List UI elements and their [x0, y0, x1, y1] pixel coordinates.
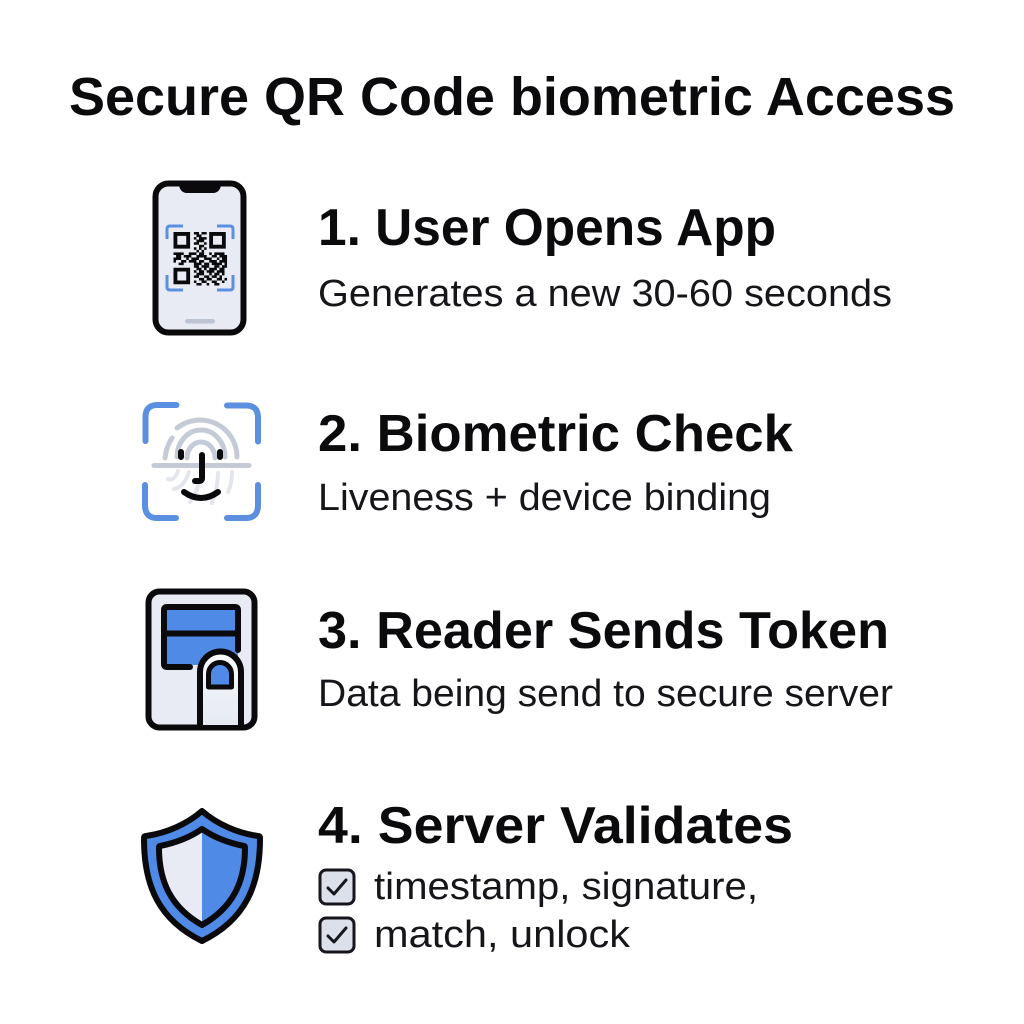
step 1 panel	[156, 184, 892, 332]
checklist line 1: timestamp, signature,	[374, 866, 758, 908]
heading 1: 1. User Opens App	[318, 199, 776, 257]
title: Secure QR Code biometric Access	[69, 67, 955, 127]
step 3 panel	[148, 592, 893, 728]
step 2 panel	[145, 405, 793, 519]
description 3: Data being send to secure server	[318, 673, 893, 715]
icon: face and fingerprint scan	[145, 405, 258, 518]
icon: phone with QR code	[156, 184, 244, 332]
step 4 panel	[144, 797, 793, 956]
checkbox: timestamp	[320, 870, 354, 904]
description 2: Liveness + device binding	[318, 477, 771, 519]
heading 2: 2. Biometric Check	[318, 405, 793, 463]
checkbox: match	[320, 918, 354, 952]
icon: shield	[144, 811, 260, 941]
heading 3: 3. Reader Sends Token	[318, 602, 889, 660]
description 1: Generates a new 30-60 seconds	[318, 273, 892, 315]
icon: reader with finger on card	[148, 592, 254, 728]
checklist line 2: match, unlock	[374, 914, 631, 956]
heading 4: 4. Server Validates	[318, 797, 793, 855]
